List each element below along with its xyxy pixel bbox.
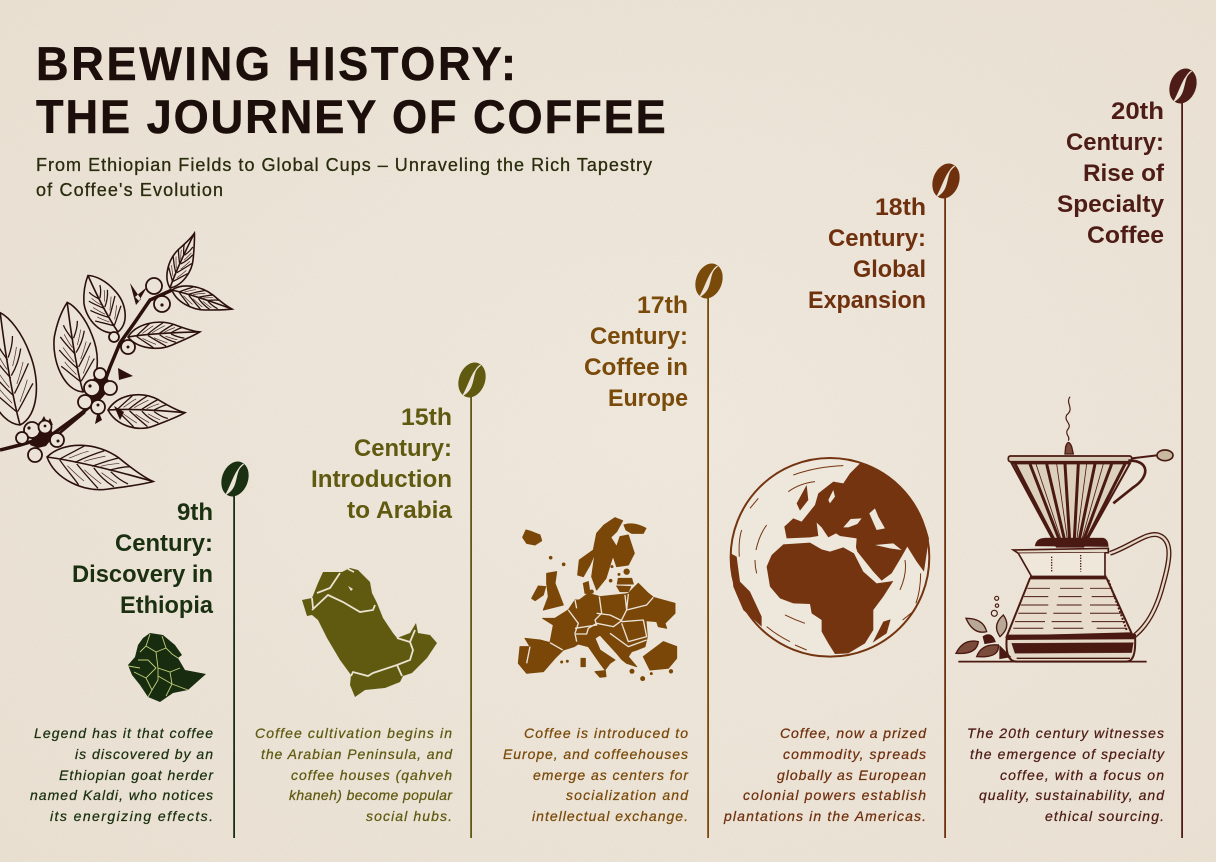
text: 17th century <box>503 725 689 824</box>
heading: 9th century: 9th <box>177 499 213 526</box>
title: THE JOURNEY OF COFFEE <box>36 90 666 143</box>
text: 15th century: coffee houses (qahveh <box>291 767 452 783</box>
text: 20th century: quality, sustainability, and <box>979 787 1165 803</box>
heading: 20th century <box>1057 98 1165 249</box>
heading: 17th century: Coffee in <box>584 354 688 381</box>
text: 17th century: Coffee is introduced to <box>524 725 688 741</box>
title: BREWING HISTORY: <box>36 37 516 90</box>
heading: 20th century: Rise of <box>1083 160 1165 187</box>
subtitle <box>36 155 652 200</box>
heading: 17th century: 17th <box>637 292 688 319</box>
subtitle: From Ethiopian Fields to Global Cups – Unraveling the Rich Tapestry <box>36 155 652 175</box>
text: 15th century: the Arabian Peninsula, and <box>261 746 453 762</box>
column: 17th century <box>503 260 727 838</box>
text: 15th century: khaneh) become popular <box>289 787 453 803</box>
heading: 20th century: Coffee <box>1087 222 1164 249</box>
text: 9th century: its energizing effects. <box>50 808 213 824</box>
title <box>36 37 666 143</box>
timeline: 15th century <box>454 359 490 838</box>
text: 17th century: intellectual exchange. <box>532 808 688 824</box>
heading: 20th century: Specialty <box>1057 191 1165 218</box>
text: 20th century: coffee, with a focus on <box>1000 767 1164 783</box>
text: 9th century: named Kaldi, who notices <box>30 787 213 803</box>
heading: 18th century: 18th <box>875 194 926 221</box>
heading: 15th century <box>311 404 453 524</box>
text: 20th century: ethical sourcing. <box>1045 808 1164 824</box>
timeline: 9th century <box>217 458 253 838</box>
text: 18th century <box>723 725 927 824</box>
heading: 17th century <box>584 292 688 412</box>
heading: 20th century: 20th <box>1111 98 1164 125</box>
heading: 17th century: Europe <box>608 385 688 412</box>
column: 9th century <box>30 458 253 838</box>
text: 9th century: Ethiopian goat herder <box>59 767 214 783</box>
text: 18th century: globally as European <box>777 767 926 783</box>
globe <box>731 458 929 657</box>
heading: 15th century: 15th <box>401 404 452 431</box>
heading: 17th century: Century: <box>590 323 688 350</box>
heading: 9th century: Discovery in <box>72 561 213 588</box>
heading: 9th century: Ethiopia <box>120 592 214 619</box>
heading: 18th century: Century: <box>828 225 926 252</box>
heading: 18th century <box>808 194 926 314</box>
timeline: 17th century <box>691 260 727 838</box>
column: 20th century <box>956 65 1201 838</box>
illustration: pour-over coffee maker <box>956 397 1173 662</box>
subtitle: of Coffee's Evolution <box>36 180 223 200</box>
timeline: 20th century <box>1165 65 1201 838</box>
timeline: 18th century <box>928 160 964 838</box>
text: 15th century: social hubs. <box>366 808 452 824</box>
heading: 15th century: Introduction <box>311 466 452 493</box>
heading: 15th century: Century: <box>354 435 452 462</box>
text: 9th century <box>30 725 214 824</box>
text: 20th century: The 20th century witnesses <box>967 725 1164 741</box>
text: 18th century: colonial powers establish <box>743 787 926 803</box>
heading: 9th century: Century: <box>115 530 213 557</box>
map: Ethiopia <box>128 633 206 702</box>
text: 15th century <box>255 725 453 824</box>
map: Europe <box>518 518 677 681</box>
text: 20th century: the emergence of specialty <box>970 746 1165 762</box>
text: 18th century: Coffee, now a prized <box>780 725 927 741</box>
column: 15th century <box>255 359 490 838</box>
text: 18th century: commodity, spreads <box>783 746 926 762</box>
column: 18th century <box>723 160 964 838</box>
text: 17th century: Europe, and coffeehouses <box>503 746 688 762</box>
heading: 9th century <box>72 499 214 619</box>
map: Arabian Peninsula <box>302 568 437 697</box>
text: 20th century <box>967 725 1165 824</box>
text: 15th century: Coffee cultivation begins in <box>255 725 452 741</box>
text: 17th century: socialization and <box>566 787 689 803</box>
heading: 15th century: to Arabia <box>347 497 453 524</box>
text: 17th century: emerge as centers for <box>533 767 689 783</box>
text: 9th century: Legend has it that coffee <box>34 725 213 741</box>
heading: 20th century: Century: <box>1066 129 1164 156</box>
text: 9th century: is discovered by an <box>75 746 213 762</box>
illustration: coffee branch <box>0 229 235 502</box>
heading: 18th century: Global <box>853 256 926 283</box>
text: 18th century: plantations in the Americas. <box>723 808 926 824</box>
heading: 18th century: Expansion <box>808 287 926 314</box>
